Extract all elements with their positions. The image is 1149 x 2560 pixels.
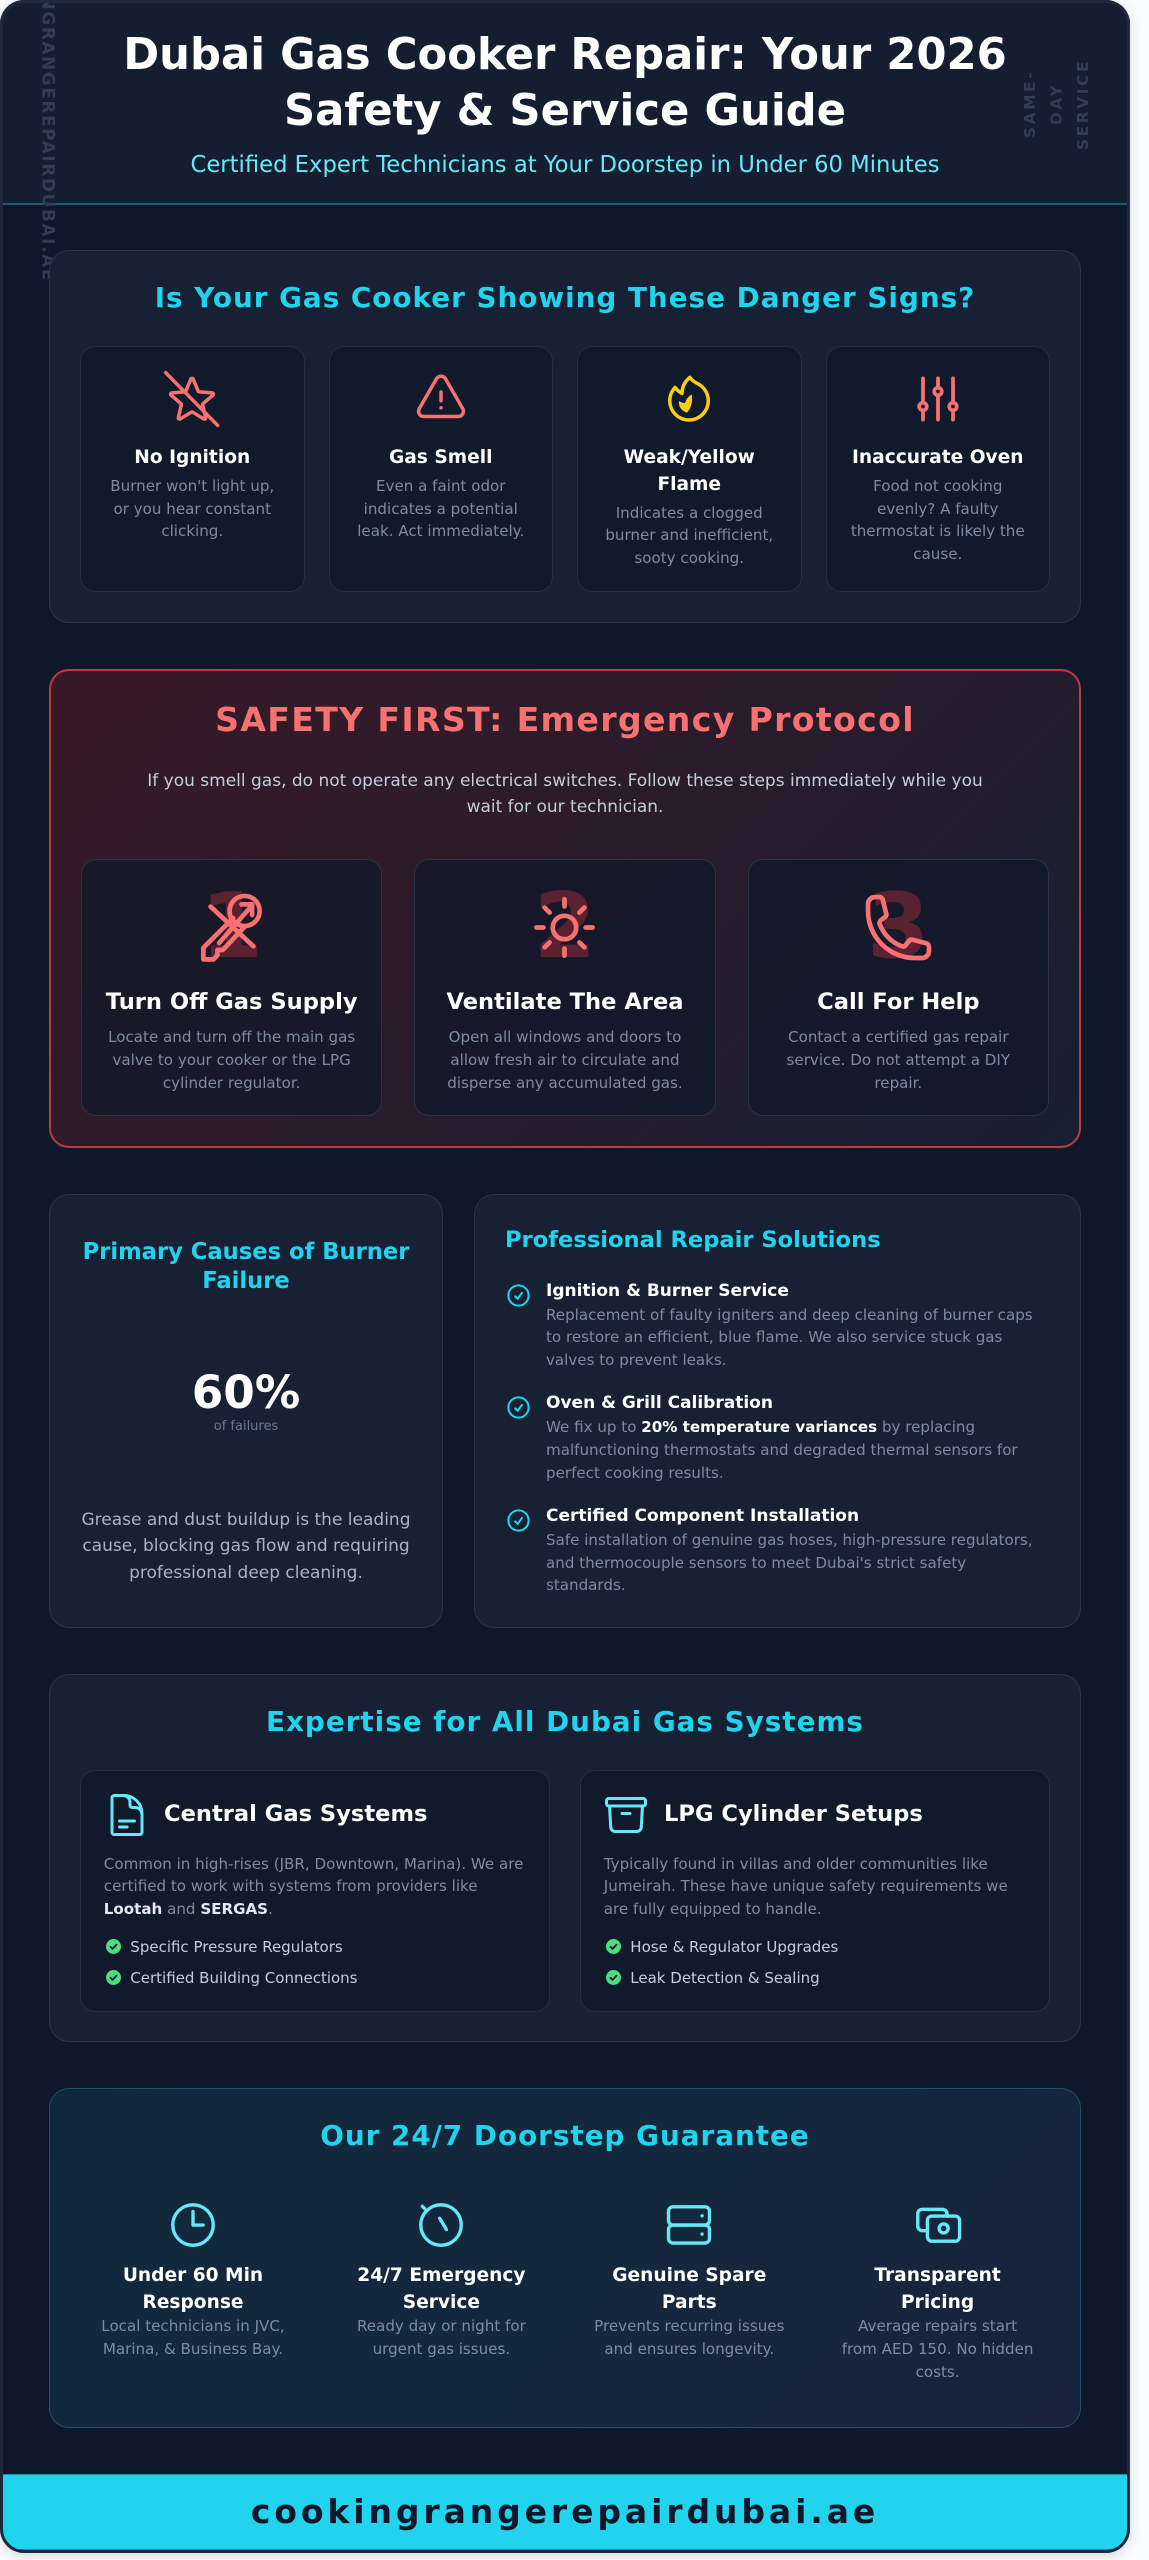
card text: clicking.	[161, 522, 223, 540]
icon: flame	[668, 376, 710, 422]
solution 2: Oven & Grill Calibration	[546, 1393, 773, 1413]
icon: phone	[866, 894, 932, 960]
text: costs.	[916, 2363, 960, 2381]
heading: Expertise for All Dubai Gas Systems	[266, 1705, 864, 1738]
bullet: Leak Detection & Sealing	[630, 1968, 820, 1986]
title	[123, 30, 1007, 136]
solution 2	[546, 1393, 1018, 1482]
intro text	[147, 771, 983, 817]
icon: crossed star	[164, 370, 220, 428]
icon: warning triangle	[416, 374, 466, 418]
step 3 card	[748, 859, 1049, 1116]
icon: bullet check	[106, 1970, 121, 1985]
text: Transparent	[874, 2265, 1001, 2286]
card text: Jumeirah. These have unique safety requirements we	[604, 1877, 1008, 1895]
card text: burner and inefficient,	[605, 526, 773, 544]
card text: Lootah and SERGAS.	[104, 1900, 273, 1918]
header	[0, 0, 1130, 205]
card heading: Central Gas Systems	[164, 1801, 427, 1827]
card text: sooty cooking.	[634, 549, 744, 567]
guarantee 2	[357, 2203, 526, 2358]
solution 1	[546, 1281, 1033, 1369]
card text	[605, 447, 773, 567]
step text: Open all windows and doors to	[449, 1028, 681, 1046]
heading: Professional Repair Solutions	[505, 1227, 881, 1253]
text: Genuine Spare	[612, 2265, 766, 2286]
text: Pricing	[901, 2292, 974, 2313]
step text: Turn Off Gas Supply	[106, 989, 358, 1015]
card: gas smell	[328, 346, 553, 592]
right watermark: DAY	[1048, 83, 1066, 125]
card text: leak. Act immediately.	[357, 522, 524, 540]
panel: gas systems	[49, 1674, 1081, 2042]
card heading: LPG Cylinder Setups	[664, 1801, 923, 1827]
card text: Even a faint odor	[376, 477, 505, 495]
step text: service. Do not attempt a DIY	[787, 1051, 1010, 1069]
heading: Failure	[202, 1268, 290, 1294]
card text: or you hear constant	[114, 500, 271, 518]
text: Marina, & Business Bay.	[103, 2340, 283, 2358]
text: Response	[142, 2292, 244, 2313]
card text	[104, 1855, 523, 1918]
right watermark: SAME-	[1021, 70, 1039, 138]
solution 3: and thermocouple sensors to meet Dubai's strict safety	[546, 1554, 966, 1572]
guarantee 3	[594, 2205, 784, 2358]
guarantee 1	[101, 2203, 285, 2358]
card text: Food not cooking	[873, 477, 1002, 495]
card text: Gas Smell	[389, 447, 492, 468]
icon: stopwatch	[419, 2203, 463, 2247]
solution 2: malfunctioning thermostats and degraded thermal sensors for	[546, 1441, 1018, 1459]
stat: 60%: 60%	[192, 1366, 300, 1419]
step text: disperse any accumulated gas.	[447, 1074, 683, 1092]
text: Average repairs start	[858, 2317, 1017, 2335]
solution 1: to restore an efficient, blue flame. We also service stuck gas	[546, 1328, 1002, 1346]
right watermark	[1021, 58, 1092, 150]
text: 24/7 Emergency	[357, 2265, 526, 2286]
text: Ready day or night for	[357, 2317, 526, 2335]
step text	[787, 989, 1010, 1092]
icon: bullet check	[606, 1939, 621, 1954]
panel: guarantee	[49, 2088, 1081, 2428]
text: Service	[403, 2292, 480, 2313]
icon: shut-off key	[201, 894, 262, 962]
card: no ignition	[80, 346, 304, 592]
icon: banknotes	[911, 2198, 965, 2252]
text: urgent gas issues.	[373, 2340, 510, 2358]
bullet: Specific Pressure Regulators	[130, 1938, 343, 1956]
text: and ensures longevity.	[604, 2340, 774, 2358]
bullet: Hose & Regulator Upgrades	[630, 1938, 838, 1956]
text	[818, 2263, 1058, 2383]
description: cause, blocking gas flow and requiring	[82, 1536, 410, 1556]
guarantee 4	[818, 2198, 1058, 2413]
card text	[357, 447, 524, 540]
card text	[110, 447, 274, 540]
text	[357, 2265, 526, 2358]
card: inaccurate oven	[826, 346, 1050, 592]
step text: Ventilate The Area	[446, 989, 684, 1015]
icon: sliders	[917, 376, 959, 422]
description	[81, 1510, 410, 1583]
step text	[106, 989, 358, 1092]
heading: Our 24/7 Doorstep Guarantee	[320, 2119, 810, 2152]
card text: evenly? A faulty	[877, 500, 998, 518]
solution 3	[546, 1506, 1033, 1594]
panel: repair solutions	[474, 1194, 1081, 1628]
card: LPG	[580, 1770, 1050, 2012]
solution 3: Certified Component Installation	[546, 1506, 859, 1526]
card text: Typically found in villas and older communities like	[604, 1855, 988, 1873]
card text: indicates a potential	[364, 500, 518, 518]
title: Safety & Service Guide	[284, 86, 846, 136]
step 2 card	[414, 859, 716, 1116]
card text: thermostat is likely the	[851, 522, 1025, 540]
card text: No Ignition	[134, 447, 250, 468]
card text: Common in high-rises (JBR, Downtown, Marina). We are	[104, 1855, 523, 1873]
heading	[83, 1238, 410, 1294]
text	[569, 2263, 809, 2361]
icon: archive box	[605, 1797, 647, 1833]
card text: Weak/Yellow	[624, 447, 755, 468]
heading: Is Your Gas Cooker Showing These Danger Signs?	[155, 281, 975, 314]
text: Under 60 Min	[123, 2265, 263, 2286]
step text: Contact a certified gas repair	[788, 1028, 1009, 1046]
solution 2: We fix up to 20% temperature variances by replacing	[546, 1418, 975, 1436]
intro text: If you smell gas, do not operate any electrical switches. Follow these steps immediately while you	[147, 771, 983, 791]
right watermark: SERVICE	[1074, 58, 1092, 150]
card: central gas	[80, 1770, 550, 2012]
panel: safety first	[49, 669, 1081, 1148]
card text: cause.	[913, 545, 962, 563]
footer	[0, 2474, 1130, 2550]
icon: document	[110, 1794, 144, 1836]
icon: sun	[534, 897, 595, 958]
card text: Inaccurate Oven	[852, 447, 1023, 468]
step text: repair.	[874, 1074, 922, 1092]
heading: SAFETY FIRST: Emergency Protocol	[215, 700, 915, 738]
description: professional deep cleaning.	[129, 1563, 363, 1583]
step text	[446, 989, 684, 1092]
card text: are fully equipped to handle.	[604, 1900, 822, 1918]
solution 1: Ignition & Burner Service	[546, 1281, 789, 1301]
icon: parts stack	[662, 2198, 716, 2252]
card text: Flame	[657, 474, 721, 495]
heading: Primary Causes of Burner	[83, 1238, 409, 1264]
card text: Indicates a clogged	[616, 504, 763, 522]
solution 1: valves to prevent leaks.	[546, 1351, 727, 1369]
panel: primary causes	[49, 1194, 443, 1628]
icon: bullet check	[106, 1939, 121, 1954]
step text: Call For Help	[817, 989, 980, 1015]
step text: valve to your cooker or the LPG	[112, 1051, 351, 1069]
icon: check 1	[507, 1284, 530, 1307]
subtitle: Certified Expert Technicians at Your Doorstep in Under 60 Minutes	[190, 152, 940, 178]
solution 1: Replacement of faulty igniters and deep cleaning of burner caps	[546, 1306, 1033, 1324]
bullet: Certified Building Connections	[130, 1968, 358, 1986]
icon: check 2	[507, 1396, 530, 1419]
text	[101, 2265, 285, 2358]
description: Grease and dust buildup is the leading	[81, 1510, 410, 1530]
intro text: wait for our technician.	[467, 797, 663, 817]
card text	[851, 447, 1025, 563]
card: weak flame	[577, 346, 802, 592]
step text: cylinder regulator.	[163, 1074, 300, 1092]
title: Dubai Gas Cooker Repair: Your 2026	[123, 30, 1007, 80]
solution 3: Safe installation of genuine gas hoses, high-pressure regulators,	[546, 1531, 1033, 1549]
card text: Burner won't light up,	[110, 477, 274, 495]
panel: danger signs	[49, 250, 1081, 623]
text: Prevents recurring issues	[594, 2317, 784, 2335]
step text: Locate and turn off the main gas	[108, 1028, 355, 1046]
step 1 card	[81, 859, 382, 1116]
card text: certified to work with systems from providers like	[104, 1877, 478, 1895]
step number: 2	[534, 874, 596, 979]
card text	[603, 1855, 1008, 1918]
text: Parts	[662, 2292, 717, 2313]
step number: 1	[200, 874, 263, 979]
footer url: cookingrangerepairdubai.ae	[251, 2492, 879, 2531]
solution 3: standards.	[546, 1576, 626, 1594]
text: Local technicians in JVC,	[101, 2317, 285, 2335]
step number: 3	[867, 874, 930, 979]
stat caption: of failures	[214, 1419, 278, 1434]
text: from AED 150. No hidden	[842, 2340, 1033, 2358]
step text: allow fresh air to circulate and	[450, 1051, 680, 1069]
icon: clock	[171, 2203, 215, 2247]
icon: bullet check	[606, 1970, 621, 1985]
icon: check 3	[507, 1509, 530, 1532]
solution 2: perfect cooking results.	[546, 1464, 724, 1482]
